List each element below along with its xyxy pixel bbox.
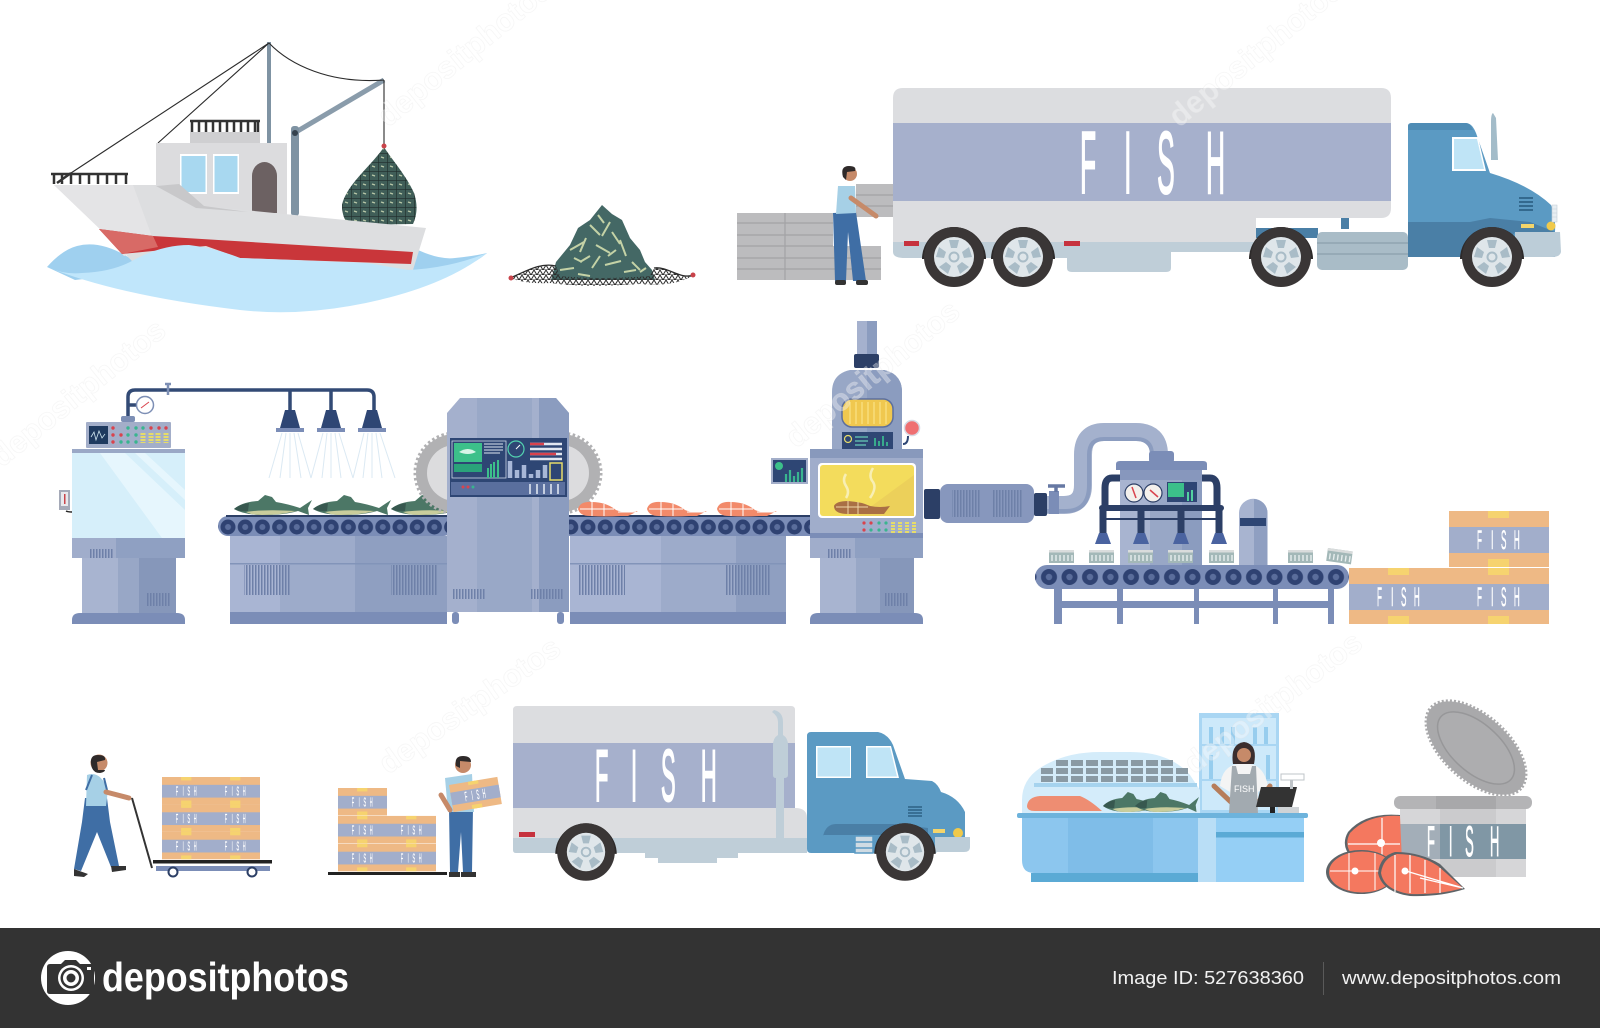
filler body — [1116, 451, 1207, 565]
connector cylinder and pipe — [924, 432, 1159, 523]
catch net hanging — [342, 144, 417, 225]
table — [230, 536, 447, 624]
machine: canning filler — [1035, 451, 1353, 624]
cart boxes: FISH — [225, 785, 246, 800]
navy manifold — [1095, 478, 1227, 544]
worker carrying box: FISH — [464, 787, 487, 805]
logo wordmark: depositphotos — [102, 954, 349, 1000]
conveyor: fish line — [218, 495, 469, 624]
hull — [54, 184, 426, 270]
shop assistant: FISH — [1234, 784, 1255, 794]
illustration: fishing boat — [47, 42, 487, 312]
pallet stack: FISH — [352, 852, 373, 867]
oven base — [810, 538, 923, 624]
fish on belt — [234, 495, 469, 515]
salmon pieces — [578, 502, 777, 516]
bow railing — [51, 173, 128, 184]
can body — [1394, 796, 1532, 877]
truck wheels — [555, 823, 617, 881]
FISH trailer label: FISH — [1080, 113, 1225, 212]
glass display case — [1022, 752, 1200, 813]
illustration: semi truck — [893, 88, 1561, 287]
sea water — [47, 245, 487, 312]
watermarks: depositphotos — [778, 293, 966, 454]
image id: Image ID: 527638360 — [1112, 967, 1304, 988]
stacked FISH boxes — [1349, 511, 1549, 624]
tractor cab — [1256, 113, 1561, 257]
stacked FISH boxes: FISH — [1477, 526, 1520, 556]
lid — [1410, 684, 1542, 812]
machine: cutting unit — [447, 398, 569, 624]
watermarks: depositphotos — [1177, 624, 1369, 781]
cart boxes — [162, 777, 260, 859]
logo icon: camera — [41, 951, 95, 1005]
worker — [833, 166, 876, 285]
conveyor: salmon line — [565, 502, 815, 624]
worker — [74, 754, 129, 877]
pallet stack: FISH — [352, 824, 373, 839]
pallet stack: FISH — [401, 824, 422, 839]
wheelhouse — [156, 121, 287, 228]
FISH truck label: FISH — [595, 736, 717, 817]
glass tank — [59, 449, 185, 538]
stacked grey boxes — [737, 184, 894, 280]
shop assistant — [1214, 742, 1270, 813]
counter — [1017, 813, 1308, 882]
site url: www.depositphotos.com — [1341, 967, 1561, 988]
can label: FISH — [1427, 817, 1499, 865]
side monitor — [771, 458, 808, 484]
cart boxes: FISH — [176, 840, 197, 855]
worker carrying box — [441, 756, 502, 877]
trailer — [893, 88, 1391, 272]
can conveyor — [1035, 565, 1349, 624]
fuel tank — [1317, 232, 1408, 270]
footer bar — [0, 928, 1600, 1028]
tank base — [72, 538, 185, 624]
control panel — [86, 422, 171, 448]
sealer column — [1239, 499, 1268, 565]
cart boxes: FISH — [225, 840, 246, 855]
illustration: boxes on pallet with worker — [328, 756, 502, 877]
dome — [832, 370, 920, 450]
pallet stack: FISH — [352, 796, 373, 811]
cash register — [1256, 774, 1304, 813]
exhaust — [772, 710, 795, 850]
machine: washing station — [59, 384, 395, 624]
control screen — [450, 438, 567, 497]
cart — [132, 798, 272, 876]
illustration: open fish can — [1326, 684, 1542, 896]
salmon steaks — [1326, 815, 1465, 896]
chimney — [854, 321, 879, 368]
cart boxes: FISH — [176, 812, 197, 827]
illustration: worker loading boxes — [737, 166, 894, 285]
watermarks: depositphotos — [372, 630, 567, 781]
cart boxes: FISH — [225, 812, 246, 827]
cab — [807, 732, 970, 853]
belt — [218, 515, 453, 536]
stacked FISH boxes: FISH — [1377, 583, 1420, 613]
oven chamber — [810, 449, 923, 538]
illustration: worker pulling pallet cart — [74, 754, 272, 877]
crane and mast — [71, 42, 384, 216]
watermarks — [0, 0, 1369, 781]
drinks fridge — [1199, 713, 1279, 813]
cargo box — [513, 706, 807, 863]
cart boxes: FISH — [176, 785, 197, 800]
illustration: delivery truck — [513, 706, 970, 881]
gauges and display — [1125, 482, 1197, 502]
illustration: pile of fish in net — [508, 205, 696, 286]
pallet stack: FISH — [401, 852, 422, 867]
machine: smoking oven — [771, 321, 923, 624]
water pipe and sprayers — [121, 384, 395, 478]
saw blades — [416, 434, 600, 512]
pallet stack — [328, 788, 447, 875]
truck wheels — [922, 227, 1524, 287]
illustration: fish shop counter — [1017, 713, 1308, 882]
stacked FISH boxes: FISH — [1477, 583, 1520, 613]
back waves — [47, 244, 487, 280]
cans on belt — [1049, 548, 1353, 564]
